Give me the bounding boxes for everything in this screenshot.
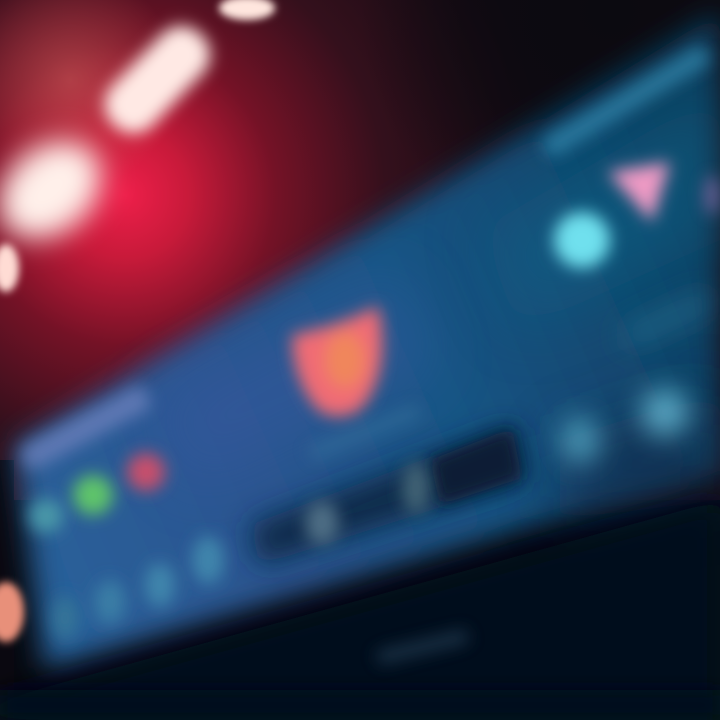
panel knobs left [52, 536, 224, 640]
bottom fill [0, 690, 720, 720]
white light pills [0, 0, 275, 292]
icon: faint pink edge mark [704, 175, 720, 215]
icon: pink triangle [608, 162, 670, 222]
left edge shadow [0, 460, 14, 720]
icon: cyan dot [554, 212, 610, 268]
display darker end [430, 428, 522, 505]
red glow [0, 0, 720, 500]
dark recessed display [250, 425, 525, 565]
panel knobs right [560, 292, 714, 464]
panel lower dark edge [0, 500, 720, 720]
icon: orange shield [292, 306, 382, 417]
label strip above display [307, 403, 423, 461]
bottom light streak [375, 629, 470, 665]
pale strip top left of panel [18, 384, 153, 472]
icon: teal dot [29, 499, 63, 533]
pale strip top right of panel [539, 43, 714, 160]
orange light at left edge [0, 582, 24, 642]
icon: green dot [73, 475, 113, 515]
display glyph blobs [305, 462, 430, 545]
icon: red dot [127, 453, 165, 491]
